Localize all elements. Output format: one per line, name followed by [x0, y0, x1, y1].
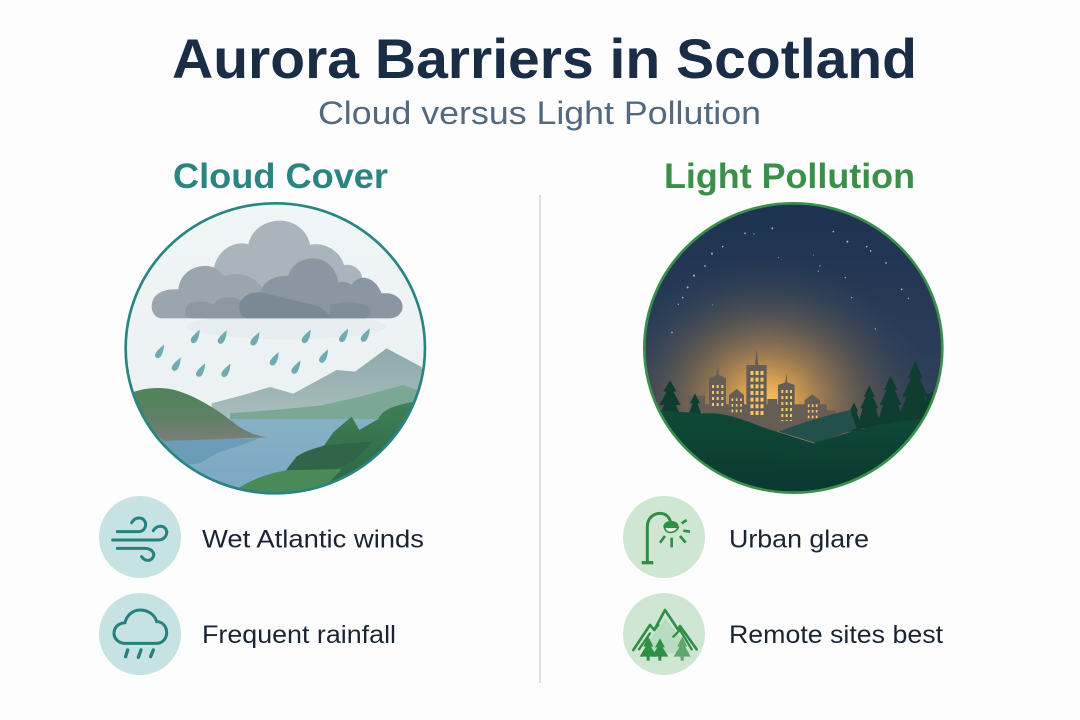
lit windows [713, 371, 817, 422]
item: wet atlantic winds [99, 496, 424, 578]
trees [657, 361, 938, 432]
left hill [130, 388, 267, 441]
right hills [286, 402, 413, 482]
label: Urban glare [729, 526, 869, 554]
heading: cloud cover: Cloud Cover [173, 157, 388, 196]
icon: rain cloud [99, 593, 181, 675]
label: Remote sites best [729, 621, 943, 649]
label: Frequent rainfall [202, 621, 396, 649]
illustration: city glow at night [640, 195, 950, 505]
icon: mountains and pines [623, 593, 705, 675]
illustration: rainy Scottish loch [120, 195, 430, 502]
panel: cloud cover [99, 157, 430, 675]
subtitle: Cloud versus Light Pollution [318, 95, 761, 131]
divider [539, 195, 541, 683]
item: remote sites best [623, 593, 943, 675]
item: frequent rainfall [99, 593, 396, 675]
label: Wet Atlantic winds [202, 526, 424, 554]
cloud [214, 220, 362, 288]
water [155, 419, 378, 488]
city skyline [688, 348, 836, 432]
icon: street lamp [623, 496, 705, 578]
panel: light pollution [623, 157, 950, 675]
title: Aurora Barriers in Scotland [172, 27, 917, 90]
hills [778, 410, 857, 443]
icon: wind [99, 496, 181, 578]
item: urban glare [623, 496, 869, 578]
mountains [212, 348, 422, 419]
rain drops [191, 330, 200, 343]
stars [671, 227, 909, 333]
heading: light pollution: Light Pollution [664, 157, 915, 196]
